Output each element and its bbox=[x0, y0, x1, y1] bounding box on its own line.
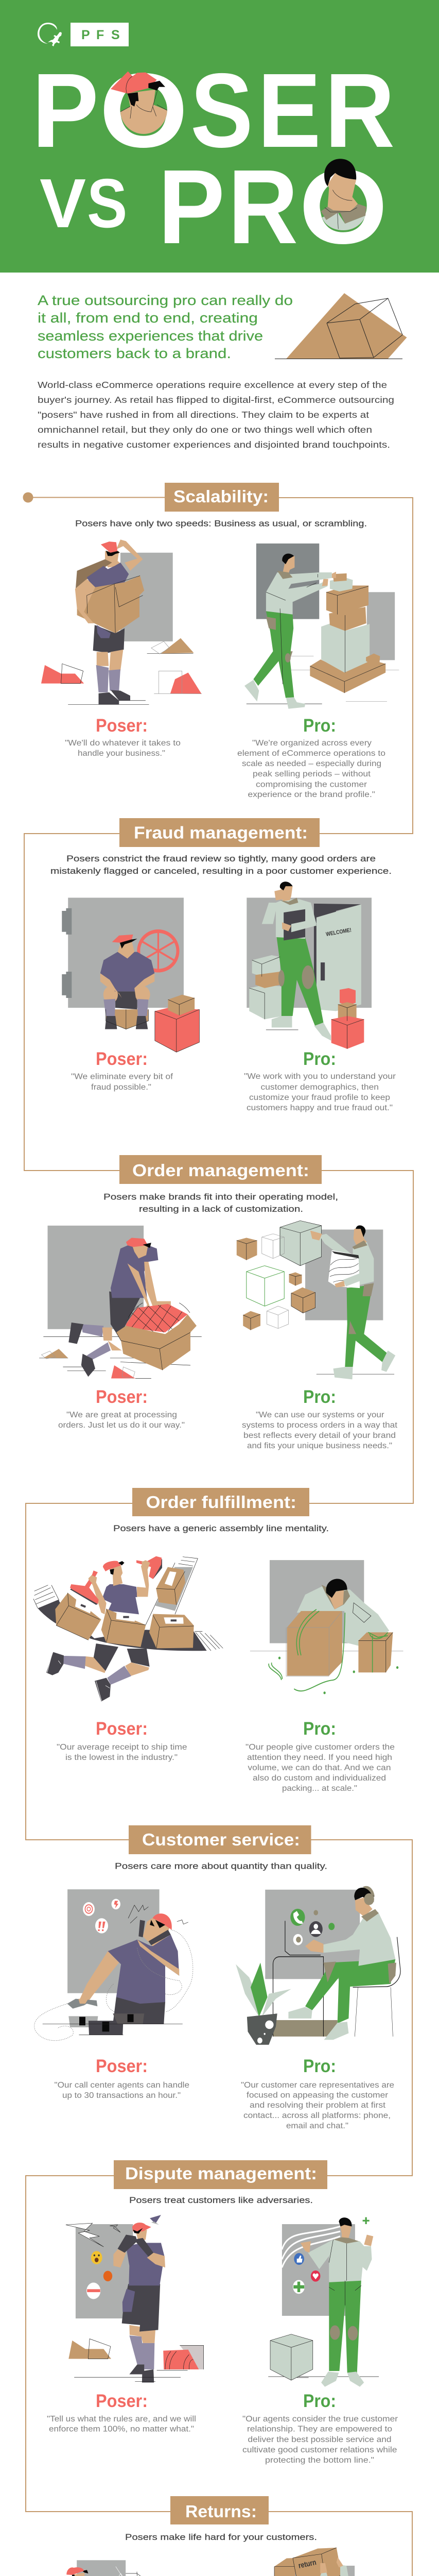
poser quote: "Our call center agents can handle bbox=[55, 2081, 189, 2090]
pro quote bbox=[237, 739, 385, 799]
subtitle: resulting in a lack of customization. bbox=[139, 1205, 303, 1214]
heading: returns bbox=[170, 2496, 269, 2524]
poser quote bbox=[55, 2081, 189, 2100]
pro quote: experience or the brand profile." bbox=[248, 790, 375, 799]
header banner bbox=[0, 0, 439, 273]
intro paragraph bbox=[38, 380, 394, 450]
pro quote: customer demographics, then bbox=[260, 1083, 379, 1092]
pro quote: "Our agents consider the true customer bbox=[242, 2415, 398, 2424]
title: POSER vs PRO: V bbox=[40, 164, 86, 242]
pro quote: relationship. They are empowered to bbox=[247, 2425, 392, 2434]
title: POSER vs PRO: O bbox=[99, 52, 188, 170]
pro quote: contact... across all platforms: phone, bbox=[243, 2111, 391, 2120]
subtitle bbox=[50, 854, 392, 876]
illustration: poser on too many phones bbox=[34, 1889, 193, 2041]
poser quote: "Tell us what the rules are, and we will bbox=[47, 2415, 196, 2424]
heading: customer service: Customer service: bbox=[142, 1830, 300, 1849]
title: POSER vs PRO: S bbox=[87, 164, 127, 242]
pro quote: compromising the customer bbox=[256, 780, 367, 789]
pro quote bbox=[241, 2081, 394, 2130]
pro quote: "We work with you to understand your bbox=[244, 1072, 396, 1081]
intro heading: seamless experiences that drive bbox=[38, 328, 263, 344]
pro quote: and fits your unique business needs." bbox=[247, 1442, 392, 1450]
label: poser: Poser: bbox=[96, 2056, 148, 2076]
logo: PFS box: P bbox=[81, 28, 90, 42]
poser quote: "We'll do whatever it takes to bbox=[65, 739, 181, 748]
pro quote: cultivate good customer relations while bbox=[242, 2446, 397, 2454]
logo: PFS box: S bbox=[111, 28, 120, 42]
intro heading: A true outsourcing pro can really do bbox=[38, 293, 293, 308]
panel: returns bbox=[40, 2496, 396, 2576]
illustration: pro choosing custom boxes bbox=[237, 1221, 395, 1379]
title: POSER vs PRO bbox=[32, 52, 395, 266]
intro paragraph: "posers" have rushed in from all directions. They claim to be experts at bbox=[38, 410, 369, 420]
poser quote: enforce them 100%, no matter what." bbox=[49, 2425, 194, 2434]
label: pro: Pro: bbox=[303, 2391, 336, 2411]
label: pro: Pro: bbox=[303, 1719, 336, 1739]
pro quote: "We can use our systems or your bbox=[256, 1411, 384, 1419]
poser quote: fraud possible." bbox=[91, 1083, 151, 1092]
poser quote: "We are great at processing bbox=[66, 1411, 177, 1419]
pro quote: "Our people give customer orders the bbox=[245, 1743, 395, 1752]
poser quote bbox=[58, 1411, 185, 1430]
heading: scalability: Scalability: bbox=[173, 487, 269, 506]
illustration: pro at welcome door: WELCOME! bbox=[325, 927, 352, 938]
illustration: pro shelving returns bbox=[255, 2548, 391, 2576]
panel: customer service bbox=[34, 1825, 400, 2130]
poser face in O bbox=[111, 71, 167, 134]
subtitle: Posers make brands fit into their operating model, bbox=[103, 1192, 338, 1201]
heading: dispute management: Dispute management: bbox=[125, 2164, 317, 2183]
poser quote: orders. Just let us do it our way." bbox=[58, 1421, 185, 1430]
logo: gecko swirl bbox=[38, 23, 62, 46]
heading: order management: Order management: bbox=[132, 1161, 309, 1180]
heading: fraud management bbox=[119, 818, 320, 847]
illustration: poser boxing stance bbox=[66, 2215, 204, 2382]
heading: scalability bbox=[165, 483, 279, 512]
label: poser: Poser: bbox=[96, 1719, 148, 1739]
heading: order fulfillment bbox=[132, 1488, 309, 1516]
poser quote bbox=[71, 1073, 173, 1092]
title: POSER vs PRO: R bbox=[228, 148, 298, 266]
illustration: poser overwhelmed by box bbox=[41, 539, 202, 704]
illustration: pro shelving returns: return bbox=[297, 2558, 317, 2570]
panel: order fulfillment bbox=[33, 1488, 403, 1793]
logo: PFS box bbox=[71, 23, 129, 46]
pro quote: email and chat." bbox=[286, 2122, 348, 2130]
label: pro: Pro: bbox=[303, 1049, 336, 1069]
pro quote: focused on appeasing the customer bbox=[247, 2091, 388, 2100]
label: poser: Poser: bbox=[96, 716, 148, 736]
poser quote bbox=[65, 739, 181, 758]
intro paragraph: results in negative customer experiences and disjointed brand touchpoints. bbox=[38, 439, 390, 450]
pro quote bbox=[242, 1411, 398, 1450]
label: pro: Pro: bbox=[303, 1387, 336, 1407]
subtitle: mistakenly flagged or canceled, resulting in a poor customer experience. bbox=[50, 867, 392, 876]
subtitle: Posers make life hard for your customers. bbox=[125, 2533, 317, 2542]
illustration: pro at laptop with headset bbox=[236, 1886, 400, 2045]
heading: returns: Returns: bbox=[185, 2502, 257, 2521]
title: POSER vs PRO: E bbox=[257, 52, 321, 170]
illustration: pro at welcome door bbox=[247, 882, 372, 1049]
pro quote: scale as needed – especially during bbox=[242, 759, 381, 768]
illustration: pro with social reactions bbox=[268, 2217, 379, 2387]
label: pro: Pro: bbox=[303, 716, 336, 736]
pro quote: systems to process orders in a way that bbox=[242, 1421, 398, 1430]
panel: scalability bbox=[41, 483, 399, 799]
intro paragraph: World-class eCommerce operations require excellence at every step of the bbox=[38, 380, 387, 390]
poser quote: "We eliminate every bit of bbox=[71, 1073, 173, 1081]
intro heading: it all, from end to end, creating bbox=[38, 310, 258, 326]
pro quote: and resolving their problem at first bbox=[250, 2101, 386, 2110]
illustration: pro wrapping gift bbox=[250, 1560, 403, 1694]
icon: collapsed box bbox=[275, 293, 407, 359]
illustration: poser kicking return box bbox=[40, 2560, 210, 2576]
label: pro: Pro: bbox=[303, 2056, 336, 2076]
pro quote: protecting the bottom line." bbox=[265, 2456, 374, 2465]
pro quote: attention they need. If you need high bbox=[247, 1753, 392, 1762]
poser quote bbox=[57, 1743, 187, 1762]
pro quote: volume, we can do that. And we can bbox=[248, 1764, 391, 1772]
poser quote: up to 30 transactions an hour." bbox=[62, 2091, 181, 2100]
title: POSER vs PRO: P bbox=[158, 148, 225, 266]
intro paragraph: buyer's journey. As retail has flipped to digital-first, eCommerce outsourcing bbox=[38, 395, 394, 405]
heading: order fulfillment: Order fulfillment: bbox=[146, 1493, 296, 1512]
title: POSER vs PRO: R bbox=[325, 52, 395, 170]
pro quote: packing... at scale." bbox=[282, 1784, 357, 1793]
illustration: pro stacking boxes bbox=[244, 544, 399, 709]
panel: fraud management bbox=[50, 818, 396, 1112]
pro quote: best reflects every detail of your brand bbox=[243, 1431, 396, 1440]
logo: PFS box: F bbox=[96, 28, 104, 42]
pro quote: customize your fraud profile to keep bbox=[249, 1093, 390, 1102]
panel: order management bbox=[39, 1155, 398, 1450]
connector lines between sections bbox=[23, 493, 413, 2576]
subtitle: Posers care more about quantity than quality. bbox=[115, 1862, 327, 1871]
pro quote: deliver the best possible service and bbox=[248, 2435, 391, 2444]
subtitle: Posers treat customers like adversaries. bbox=[129, 2196, 313, 2205]
title: POSER vs PRO: P bbox=[32, 52, 99, 170]
heading: fraud management: Fraud management: bbox=[134, 823, 308, 842]
heading: customer service bbox=[129, 1825, 311, 1854]
poser quote: handle your business." bbox=[78, 749, 165, 758]
poser quote bbox=[47, 2415, 196, 2434]
poser quote: is the lowest in the industry." bbox=[65, 1753, 178, 1762]
intro paragraph: omnichannel retail, but they only do one or two things well which often bbox=[38, 425, 372, 435]
label: poser: Poser: bbox=[96, 1049, 148, 1069]
subtitle bbox=[103, 1192, 338, 1214]
pro quote: peak selling periods – without bbox=[253, 770, 371, 778]
subtitle: Posers constrict the fraud review so tightly, many good orders are bbox=[66, 854, 376, 863]
illustration: poser at vault door bbox=[62, 897, 199, 1052]
pro quote: also do custom and individualized bbox=[253, 1774, 386, 1783]
intro heading bbox=[38, 293, 293, 361]
subtitle: Posers have only two speeds: Business as usual, or scrambling. bbox=[75, 519, 367, 529]
illustration: poser on assembly line bbox=[33, 1556, 223, 1702]
pro quote: customers happy and true fraud out." bbox=[247, 1104, 393, 1112]
pro quote: "We're organized across every bbox=[252, 739, 372, 748]
illustration: poser squeezing item into box bbox=[39, 1226, 202, 1378]
label: poser: Poser: bbox=[96, 1387, 148, 1407]
label: poser: Poser: bbox=[96, 2391, 148, 2411]
heading: dispute management bbox=[114, 2160, 327, 2189]
pro face in O bbox=[320, 159, 367, 230]
panel: dispute management bbox=[47, 2160, 398, 2465]
heading: order management bbox=[119, 1155, 322, 1184]
pro quote bbox=[244, 1072, 396, 1112]
pro quote: element of eCommerce operations to bbox=[237, 749, 385, 758]
subtitle: Posers have a generic assembly line mentality. bbox=[113, 1524, 329, 1533]
pro quote: "Our customer care representatives are bbox=[241, 2081, 394, 2090]
title: POSER vs PRO: S bbox=[190, 52, 253, 170]
title: POSER vs PRO: O bbox=[299, 148, 388, 266]
intro heading: customers back to a brand. bbox=[38, 346, 231, 361]
pro quote bbox=[242, 2415, 398, 2465]
poser quote: "Our average receipt to ship time bbox=[57, 1743, 187, 1752]
pro quote bbox=[245, 1743, 395, 1793]
